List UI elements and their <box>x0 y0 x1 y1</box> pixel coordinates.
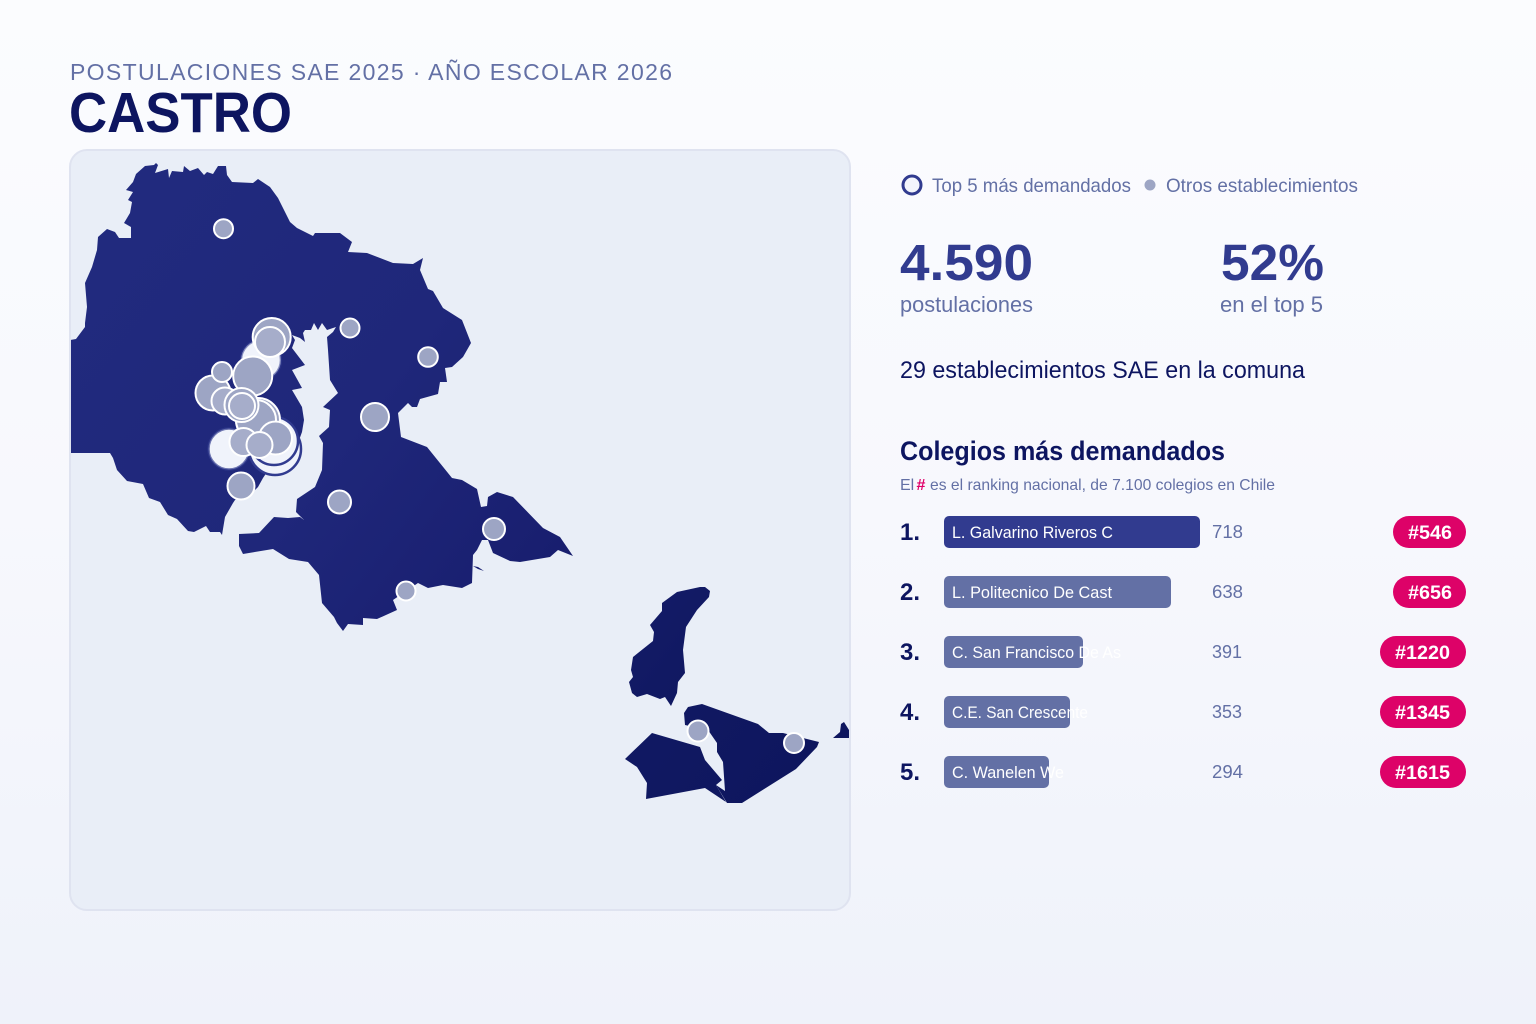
rank: 4. <box>900 699 920 726</box>
bar <box>944 696 1070 728</box>
establishments count: 29 establecimientos SAE en la comuna <box>900 357 1306 384</box>
rank: 3. <box>900 639 920 666</box>
bar <box>944 516 1200 548</box>
icon: top 5 ring <box>903 176 921 194</box>
mainland and Chiloé east peninsula <box>70 163 573 631</box>
icon: other schools dot <box>1144 180 1156 190</box>
panel: map of Castro <box>70 150 850 910</box>
stat value: 4.590 <box>900 234 1033 291</box>
bar <box>944 576 1171 608</box>
applications: 638 <box>1212 581 1243 602</box>
ranking heading <box>900 436 1275 494</box>
rank: 5. <box>900 759 920 786</box>
section subtitle: El <box>900 477 914 494</box>
row 4 <box>900 696 1466 728</box>
badge text: #1615 <box>1395 763 1450 784</box>
badge <box>1380 636 1466 668</box>
stat: share in top 5 <box>1220 234 1324 317</box>
row 1 <box>900 516 1466 548</box>
school name: C.E. San Crescente <box>952 703 1088 722</box>
school name: C. San Francisco De As <box>952 643 1121 662</box>
badge <box>1380 756 1466 788</box>
badge <box>1380 696 1466 728</box>
applications: 353 <box>1212 701 1242 722</box>
section subtitle: es el ranking nacional, de 7.100 colegios en Chile <box>930 477 1275 494</box>
badge <box>1393 516 1466 548</box>
school name: C. Wanelen We <box>952 763 1064 782</box>
row 5 <box>900 756 1466 788</box>
bar chart: most demanded schools <box>900 516 1466 788</box>
legend label: others: Otros establecimientos <box>1166 175 1358 197</box>
badge text: #1345 <box>1395 703 1450 724</box>
map panel background <box>70 150 850 910</box>
markers: top 5 most demanded schools <box>208 340 301 475</box>
badge text: #656 <box>1408 583 1452 604</box>
applications: 718 <box>1212 521 1243 542</box>
stat value: 52% <box>1221 234 1324 291</box>
bar <box>944 756 1049 788</box>
section title: Colegios más demandados <box>900 436 1225 466</box>
stat label: en el top 5 <box>1220 292 1323 317</box>
markers: other establishments <box>196 219 804 753</box>
badge text: #1220 <box>1395 643 1450 664</box>
rank: 2. <box>900 579 920 606</box>
rank: 1. <box>900 519 920 546</box>
east island <box>684 704 819 803</box>
badge <box>1393 576 1466 608</box>
stat: total applications <box>900 234 1033 317</box>
header: eyebrow and commune title <box>69 59 672 145</box>
stat label: postulaciones <box>900 292 1033 317</box>
map: commune territory <box>70 163 849 803</box>
west island <box>625 733 726 802</box>
legend label: top 5: Top 5 más demandados <box>932 175 1131 197</box>
commune title: CASTRO <box>69 81 292 145</box>
school name: L. Politecnico De Cast <box>952 583 1112 602</box>
north island <box>629 587 710 706</box>
section subtitle: # <box>916 477 926 494</box>
row 2 <box>900 576 1466 608</box>
bar <box>944 636 1083 668</box>
small inlet rock <box>473 566 484 571</box>
applications: 391 <box>1212 641 1242 662</box>
eyebrow text: POSTULACIONES SAE 2025 · AÑO ESCOLAR 2026 <box>70 59 672 85</box>
eastern islet <box>833 722 849 738</box>
badge text: #546 <box>1408 523 1452 544</box>
applications: 294 <box>1212 761 1243 782</box>
legend <box>903 175 1358 197</box>
row 3 <box>900 636 1466 668</box>
school name: L. Galvarino Riveros C <box>952 523 1113 542</box>
